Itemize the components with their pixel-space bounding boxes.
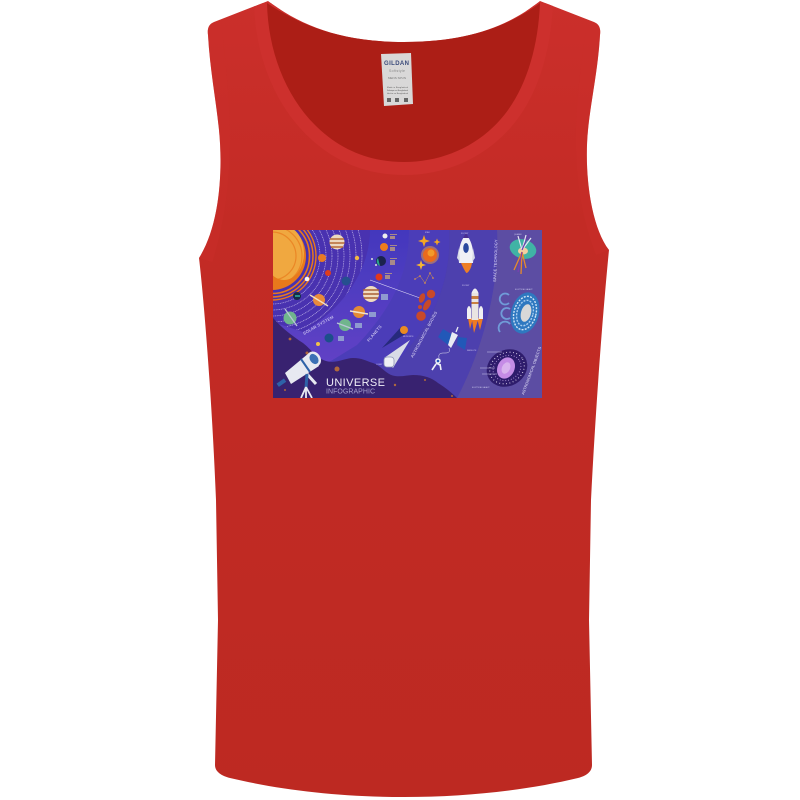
space technology heading: SPACE TECHNOLOGY (493, 239, 498, 282)
title: UNIVERSE (326, 377, 385, 389)
neck label: Hecho en Bangladesh (387, 93, 408, 95)
silver comet (384, 340, 410, 368)
rocket two (467, 288, 483, 333)
small captions: COMET (376, 364, 383, 366)
stars and star diagram (414, 235, 440, 284)
hill foreground (273, 318, 457, 398)
hill sparkles (284, 338, 453, 397)
inner neck and back lining (267, 3, 540, 162)
asteroids (416, 290, 435, 321)
sun (273, 230, 317, 301)
solar system heading: SOLAR SYSTEM (302, 314, 335, 336)
small captions: ELLIPTICAL GALAXY (472, 386, 490, 389)
astronomical objects heading: ASTRONOMICAL OBJECTS (521, 346, 542, 395)
planet captions (338, 234, 397, 341)
small captions: SATELLITE (467, 349, 477, 352)
neck label: Fabrique au Bangladesh (387, 90, 408, 92)
astronaut with tether (432, 348, 449, 370)
small captions: ROCKET (462, 285, 470, 287)
small captions: ELLIPTICAL GALAXY (515, 288, 533, 291)
telescope (276, 352, 321, 398)
solar system orbits (273, 230, 362, 330)
rocket one (457, 233, 475, 273)
universe infographic print (273, 230, 542, 398)
neck label: MENS SPUN (388, 76, 406, 80)
spiral galaxy (510, 292, 540, 334)
title: INFOGRAPHIC (326, 388, 375, 396)
gauge arcs (499, 294, 510, 332)
planets heading: PLANETS (366, 324, 383, 343)
background panels (273, 230, 542, 398)
small captions: ROCKET (461, 233, 469, 235)
neck label: GILDAN (384, 61, 409, 67)
small captions: METEORITE (403, 336, 414, 338)
quasar (510, 234, 536, 274)
neck label (381, 53, 413, 106)
title (326, 378, 384, 394)
tank top product illustration (199, 1, 609, 797)
astronomical bodies heading: ASTRONOMICAL BODIES (409, 310, 438, 358)
meteor (382, 326, 408, 348)
planets column (316, 234, 388, 346)
solar system planets (284, 234, 359, 326)
small captions: QUASAR (514, 233, 522, 236)
neck label: Made in Bangladesh (387, 87, 408, 89)
small captions: STAR (425, 231, 430, 234)
neck label: Softstyle (389, 69, 405, 73)
pointer line (370, 280, 420, 298)
shirt body (199, 1, 609, 797)
purple galaxy (486, 349, 528, 387)
satellite (438, 327, 467, 350)
small captions (376, 231, 533, 389)
